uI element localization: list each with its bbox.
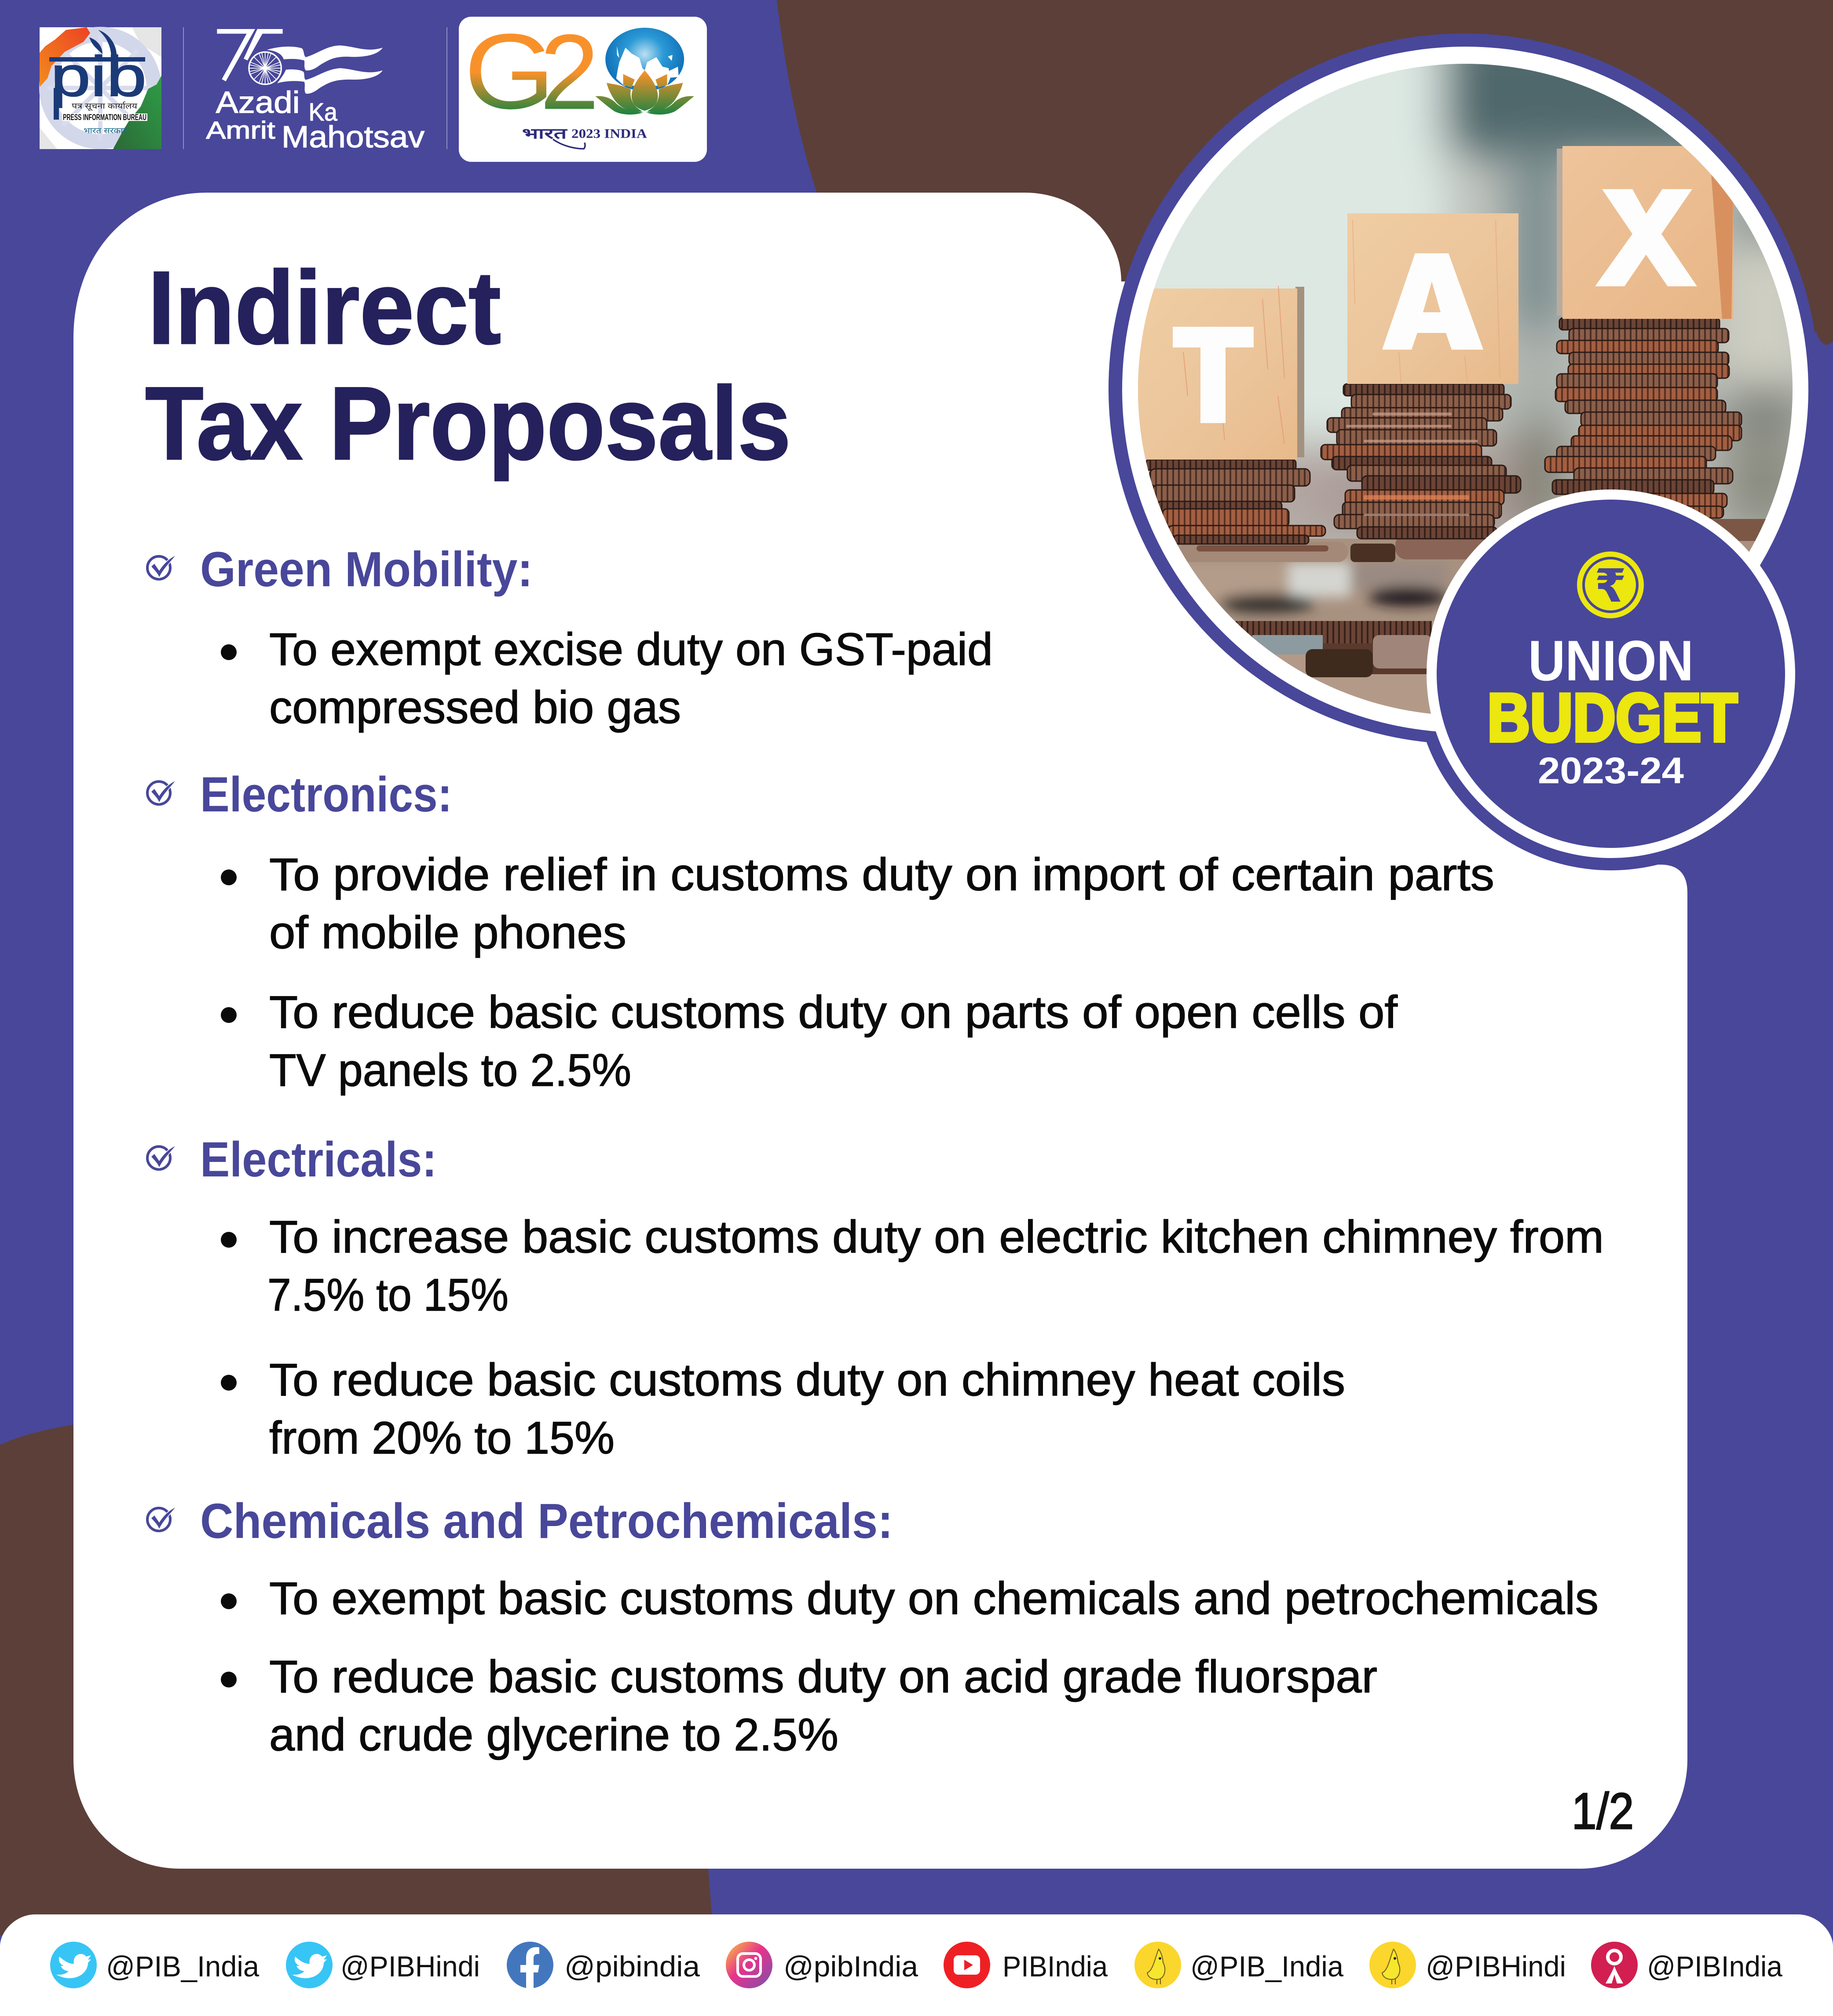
social: sharechat PIBIndia [1591,1942,1782,1988]
blurred table top [1174,539,1756,621]
block X [1557,146,1733,319]
logo: 75 Azadi Ka Amrit Mahotsav [206,29,424,154]
social: twitter PIBHindi: @PIBHindi [340,1950,480,1983]
footer bar [0,1914,1833,2016]
title [145,250,791,482]
title: Tax Proposals [145,365,791,482]
icon: check [147,781,175,804]
coin stack under A [1321,384,1521,539]
social: youtube: PIBIndia [1002,1950,1108,1983]
logo: G20 India 2023: 2023 INDIA [571,126,647,141]
bullet: mobile phones: To provide relief in customs duty on import of certain parts [269,849,1494,900]
bullet: heat coils [221,1355,1345,1464]
social: facebook [507,1942,700,1988]
logo: Press Information Bureau [40,27,161,149]
coin highlights under A [1346,413,1478,516]
bullet: TV panels: TV panels to 2.5% [269,1045,631,1096]
section: Chemicals and Petrochemicals [147,1494,1599,1760]
divider right [446,27,447,149]
background: brown top-right shape [777,0,1833,396]
section: Green Mobility [147,542,993,733]
photo: TAX blocks on coins [1138,64,1793,714]
badge: Union Budget 2023-24: UNION [1528,628,1694,693]
section: Chemicals and Petrochemicals: Chemicals and Petrochemicals: [200,1494,893,1549]
coin stack under X [1545,318,1742,518]
social: twitter PIBHindi [286,1942,480,1988]
white ring of the photo [1122,47,1808,733]
section: Electronics: Electronics: [200,767,452,822]
bullet: compressed bio gas [221,624,993,733]
logo: Press Information Bureau: पत्र सूचना कार्यालय [72,101,138,111]
social: twitter PIB_India: @PIB_India [106,1950,259,1983]
bullet: kitchen chimney: 7.5% to 15% [267,1270,509,1321]
bullet: heat coils: To reduce basic customs duty on chimney heat coils [269,1355,1345,1406]
badge: Union Budget 2023-24: BUDGET [1487,679,1738,756]
social: koo PIBHindi [1369,1942,1566,1988]
social: twitter PIB_India [50,1942,259,1988]
social: koo PIB_India [1134,1942,1343,1988]
bullet: mobile phones [221,849,1494,958]
bullet: fluorspar: To reduce basic customs duty on acid grade fluorspar [269,1651,1377,1702]
section: Green Mobility: Green Mobility: [200,542,533,597]
icon: check [147,556,175,579]
social: sharechat PIBIndia: @PIBIndia [1647,1950,1782,1983]
social: instagram [726,1942,918,1988]
divider left [183,27,184,149]
bullet: fluorspar [221,1651,1377,1760]
icon: rupee coin [1577,551,1644,618]
bullet: kitchen chimney: To increase basic customs duty on electric kitchen chimney from [269,1212,1604,1263]
coin stack under T [1146,460,1325,544]
logo: G20 India 2023 [459,11,707,162]
section: Electricals: Electricals: [200,1132,437,1187]
bullet: heat coils: from 20% to 15% [269,1413,615,1464]
social: facebook: @pibindia [564,1950,700,1983]
logo: G20 India 2023: 2 [540,12,599,131]
title: Indirect [148,250,501,366]
bullet: TV panels [221,987,1398,1096]
lower coins band [1235,519,1766,714]
block A [1347,213,1518,384]
badge: Union Budget 2023-24: 2023-24 [1538,750,1684,791]
bullet: fluorspar: and crude glycerine to 2.5% [269,1709,838,1760]
social: koo PIB_India: @PIB_India [1190,1950,1343,1983]
outer purple ring behind the Union Budget badge [1414,477,1807,870]
logo: 75 Azadi Ka Amrit Mahotsav: Amrit [206,116,275,144]
logo: 75 Azadi Ka Amrit Mahotsav: Azadi [216,85,300,120]
logo: Press Information Bureau: भारत सरकार [84,126,127,135]
bullet: compressed bio gas: compressed bio gas [269,682,681,733]
page number: 1/2 [1572,1782,1634,1840]
social: instagram: @pibIndia [783,1950,918,1983]
bullet: chemicals: To exempt basic customs duty on chemicals and petrochemicals [269,1573,1599,1624]
section: Electricals [147,1132,1604,1464]
logo: Press Information Bureau: pib [51,45,146,108]
block T [1138,286,1304,460]
bullet: mobile phones: of mobile phones [269,907,626,958]
logo: G20 India 2023: G [464,11,555,131]
bullet: compressed bio gas: To exempt excise duty on GST-paid [269,624,993,675]
background: brown bottom-left shape [0,1423,713,1935]
logo: Press Information Bureau: PRESS INFORMATION BUREAU [63,113,146,122]
panel: main white card [73,193,1687,1869]
social: koo PIBHindi: @PIBHindi [1426,1950,1566,1983]
icon: check [147,1508,175,1531]
outer ring of the photo [1109,33,1819,744]
icon: check [147,1146,175,1169]
social: youtube [944,1942,1108,1988]
bullet: TV panels: To reduce basic customs duty on parts of open cells of [269,987,1398,1038]
section: Electronics [147,767,1494,1096]
logo: G20 India 2023: भारत [522,126,568,142]
badge: Union Budget 2023-24 [1427,489,1795,858]
icon: rupee coin: ₹ [1595,559,1626,613]
logo: 75 Azadi Ka Amrit Mahotsav: Mahotsav [282,120,424,154]
logo: 75 Azadi Ka Amrit Mahotsav: Ka [309,99,337,126]
bullet: kitchen chimney [221,1212,1604,1321]
